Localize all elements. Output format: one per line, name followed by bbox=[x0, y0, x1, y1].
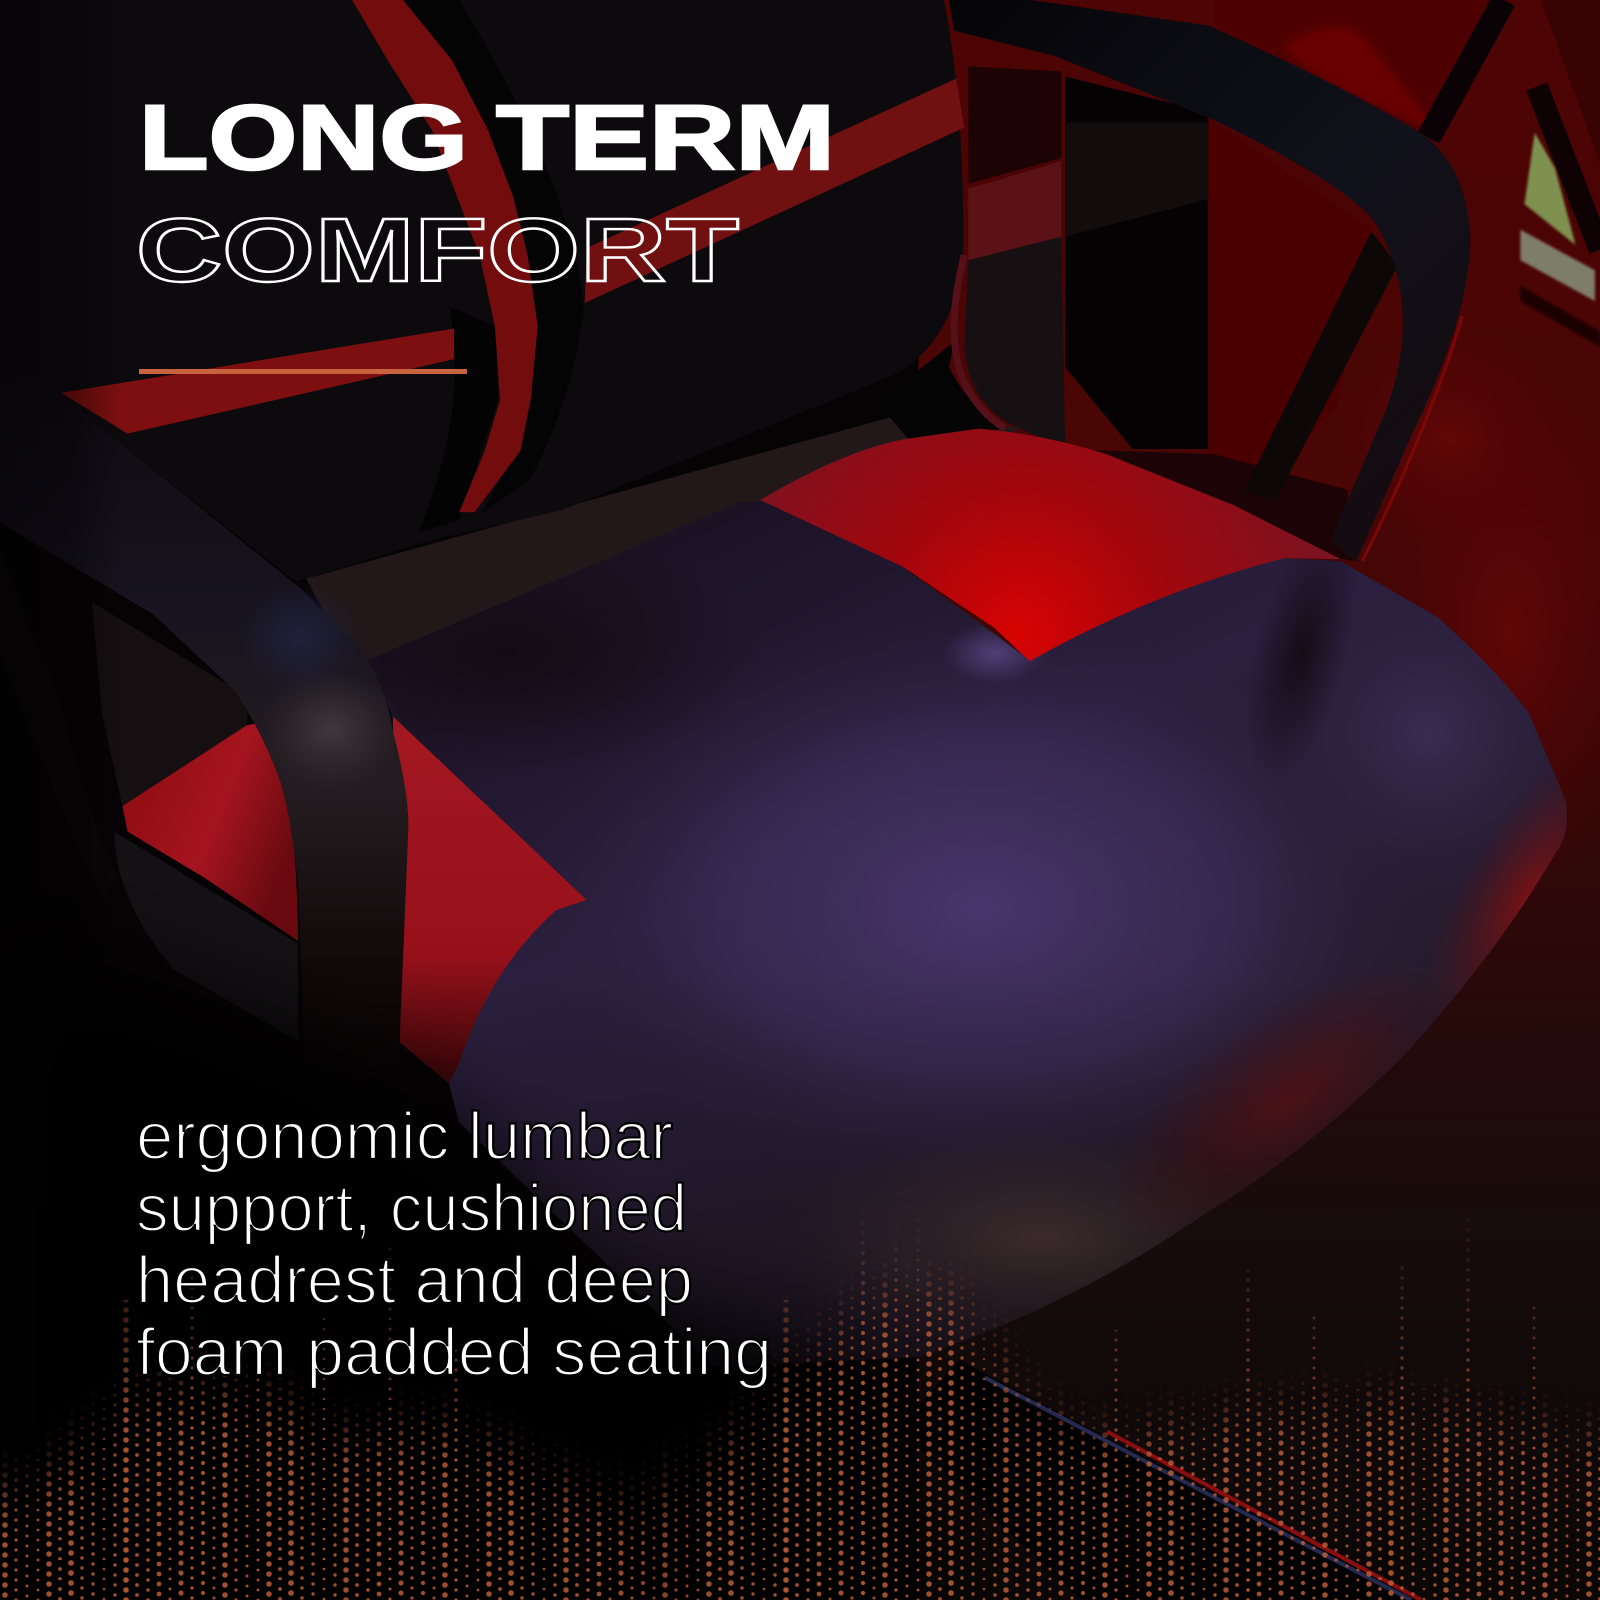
black band left of vertical stripe bbox=[418, 306, 498, 533]
mesh panel below armrest bbox=[92, 602, 248, 806]
title line: LONG TERM: LONG bbox=[139, 87, 468, 189]
line 1: ergonomic lumbar bbox=[136, 1099, 673, 1174]
line 2: support, cushioned bbox=[136, 1171, 687, 1246]
title bbox=[136, 87, 835, 301]
seat side under left panel bbox=[114, 832, 298, 1041]
black band right of vertical stripe bbox=[403, 0, 584, 515]
window light reflection bbox=[1520, 133, 1600, 347]
description text bbox=[136, 1099, 772, 1390]
title line: LONG TERM: TERM bbox=[496, 87, 835, 189]
red stripe: vertical bbox=[352, 0, 538, 512]
right armrest bbox=[949, 0, 1470, 561]
line 4: foam padded seating bbox=[136, 1315, 772, 1390]
red stripe: upper diagonal bbox=[585, 79, 964, 303]
title line: COMFORT outline: COMFORT bbox=[136, 201, 739, 301]
armrest support bbox=[0, 551, 117, 898]
accent divider bbox=[139, 369, 467, 374]
seat left red panel left of armrest bbox=[122, 721, 298, 941]
carpet behind seat bbox=[306, 408, 1020, 694]
line 3: headrest and deep bbox=[136, 1243, 693, 1318]
seat cushion bbox=[368, 502, 1567, 1364]
chair base bbox=[898, 1360, 1421, 1600]
black chair stem bbox=[878, 342, 1005, 439]
left armrest bbox=[0, 347, 408, 1082]
chair back mesh bbox=[0, 0, 1005, 582]
red stripe: lower left bbox=[61, 329, 454, 434]
title line: LONG TERM bbox=[139, 87, 835, 189]
seat front red panel bbox=[760, 429, 1341, 661]
halftone dot equaliser bbox=[0, 1180, 1600, 1600]
seat left red panel right of armrest bbox=[393, 716, 587, 1084]
background: red desk and wall bbox=[964, 0, 1600, 561]
